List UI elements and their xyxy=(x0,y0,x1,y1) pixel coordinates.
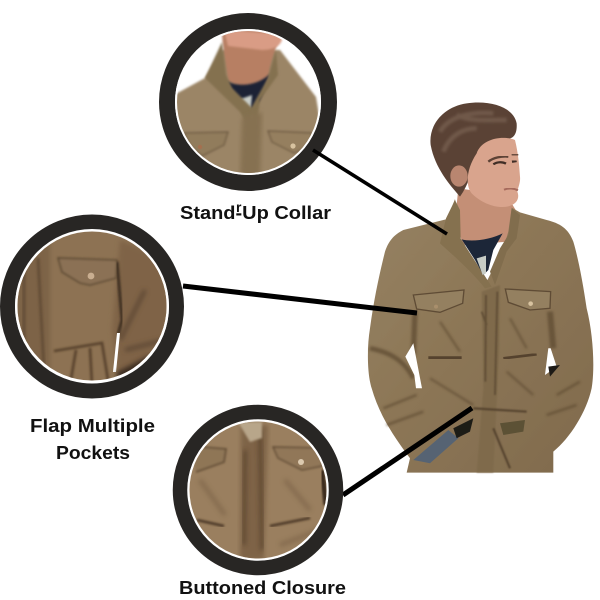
label: flap multiple pockets xyxy=(30,416,155,463)
connector line: pocket xyxy=(183,286,417,313)
front placket xyxy=(477,285,500,473)
label: flap multiple pockets: Pockets xyxy=(56,443,130,463)
callout: buttoned closure detail xyxy=(180,412,336,568)
callout: flap pockets detail xyxy=(8,222,176,391)
label: stand-up collar: r xyxy=(236,199,242,215)
waist cord and jeans cuff xyxy=(413,408,527,468)
gaps between arms and body xyxy=(405,343,422,388)
lower pocket flaps xyxy=(428,354,537,358)
connector line: collar xyxy=(313,150,447,234)
hair xyxy=(430,102,517,197)
person wearing jacket xyxy=(368,102,593,473)
arm shadows and folds xyxy=(370,312,580,425)
t-shirt xyxy=(462,233,503,275)
label: stand-up collar: Stand-Up Collar xyxy=(180,203,331,223)
ear xyxy=(450,165,468,187)
callout: stand-up collar detail xyxy=(167,21,330,183)
eyes, brows and mouth xyxy=(488,154,518,190)
connector line: closure xyxy=(343,408,472,495)
collar xyxy=(440,200,492,288)
jacket body xyxy=(368,199,593,473)
chest pockets xyxy=(413,289,551,312)
label: buttoned closure: Buttoned Closure xyxy=(179,578,346,598)
face xyxy=(468,138,520,207)
neck xyxy=(455,188,517,245)
label: flap multiple pockets: Flap Multiple xyxy=(30,416,155,436)
